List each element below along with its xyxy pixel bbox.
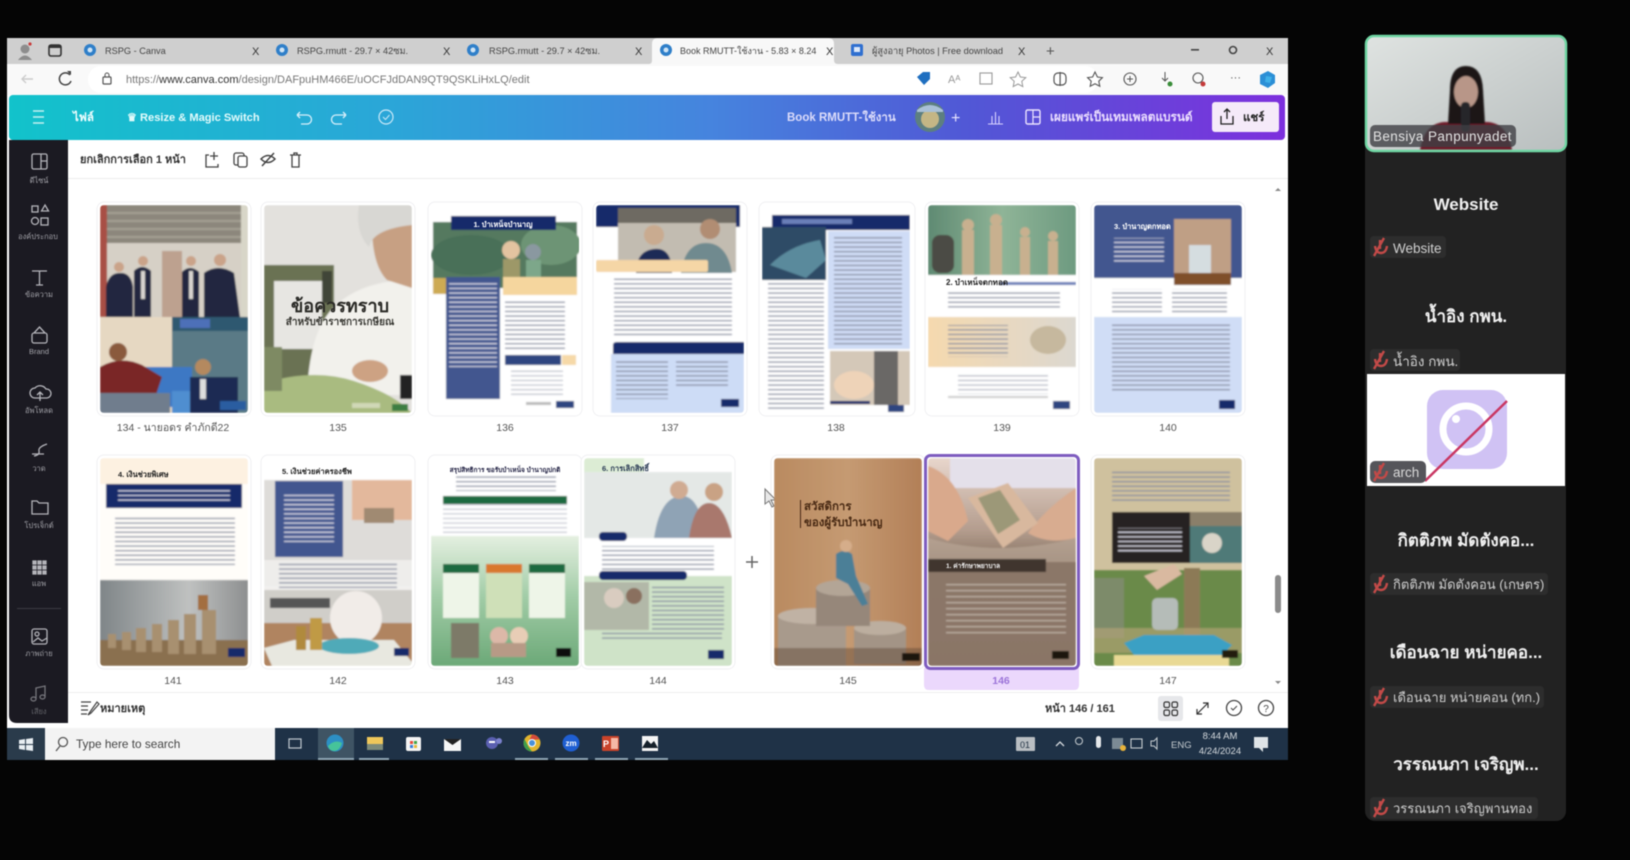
tab strip: X bbox=[1266, 46, 1274, 58]
participant: name 4 bbox=[1370, 531, 1548, 595]
tab strip: Book RMUTT-ใช้งาน - 5.83 × 8.24 bbox=[680, 46, 816, 56]
page 146 label: 146 bbox=[992, 675, 1010, 687]
name tag bbox=[1370, 125, 1516, 147]
address bar: ··· bbox=[1230, 72, 1241, 84]
participant: Website bbox=[1370, 195, 1498, 258]
system tray bbox=[1016, 731, 1268, 757]
page 140 label: 140 bbox=[1159, 422, 1177, 434]
app logo bbox=[1425, 390, 1507, 481]
icon: uploads bbox=[30, 386, 51, 401]
page 139 thumbnail bbox=[928, 205, 1076, 413]
sidebar labels: เสียง bbox=[31, 707, 47, 716]
page 134 label: 134 - นายอดร คำภักดี22 bbox=[117, 421, 229, 434]
address bar bbox=[7, 64, 1288, 95]
participant: name 6 bbox=[1370, 755, 1539, 819]
notes bar: หน้า 146 / 161 bbox=[1045, 702, 1115, 715]
system tray: ENG bbox=[1171, 740, 1192, 751]
canva top bar: ไฟล์ bbox=[71, 110, 94, 124]
thumbnail title: สำหรับข้าราชการเกษียณ bbox=[286, 316, 395, 328]
page 146 thumbnail selected bbox=[928, 458, 1076, 666]
page 136 thumbnail bbox=[431, 205, 581, 413]
page 135 label: 135 bbox=[329, 422, 347, 434]
tab strip bbox=[7, 38, 1288, 64]
share button bbox=[1212, 102, 1279, 132]
icon: elements bbox=[32, 205, 48, 225]
thumbnail heading: 5. เงินช่วยค่าครองชีพ bbox=[282, 467, 352, 476]
mouse cursor bbox=[765, 489, 776, 507]
windows taskbar bbox=[7, 728, 1288, 760]
sidebar labels: อัพโหลด bbox=[25, 406, 53, 415]
canva top bar: Book RMUTT-ใช้งาน bbox=[787, 110, 896, 124]
tab strip: X bbox=[443, 46, 451, 58]
sidebar labels: ดีไซน์ bbox=[29, 176, 49, 185]
participant: Website: Website bbox=[1434, 195, 1498, 214]
grid view button bbox=[1158, 696, 1183, 721]
tab strip: RSPG.rmutt - 29.7 × 42ซม. bbox=[489, 46, 600, 56]
taskbar app icons: zm bbox=[565, 739, 577, 748]
page 143 thumbnail bbox=[431, 458, 579, 666]
taskbar app icons: P bbox=[603, 739, 609, 749]
tab strip: X bbox=[826, 46, 834, 58]
page 137 thumbnail bbox=[596, 205, 744, 413]
sidebar labels: แอพ bbox=[32, 579, 46, 588]
thumbnail heading: 6. การเลิกสิทธิ์ bbox=[602, 462, 650, 473]
tab strip: ผู้สูงอายุ Photos | Free download bbox=[872, 46, 1003, 57]
page 144 thumbnail bbox=[584, 458, 732, 666]
page 137 label: 137 bbox=[661, 422, 679, 434]
participant: name 2 bbox=[1370, 303, 1507, 371]
thumbnail title: ข้อควรทราบ bbox=[291, 296, 389, 316]
thumbnail heading: 4. เงินช่วยพิเศษ bbox=[118, 470, 169, 479]
page 141 label: 141 bbox=[164, 675, 182, 687]
add page plus bbox=[746, 556, 758, 568]
canva top bar bbox=[9, 95, 1285, 140]
icon: apps bbox=[33, 561, 46, 574]
zoom participant panel bbox=[1365, 36, 1566, 821]
editor toolbar bbox=[68, 140, 1288, 179]
sidebar labels: วาด bbox=[32, 464, 46, 473]
thumbnail heading: 1. ค่ารักษาพยาบาล bbox=[946, 562, 1000, 570]
taskbar app icons bbox=[326, 734, 658, 752]
participant: name 5 bbox=[1370, 642, 1544, 708]
participant: name 6: วรรณนภา เจริญพานทอง bbox=[1393, 801, 1532, 816]
tab strip: X bbox=[635, 46, 643, 58]
sidebar labels: ภาพถ่าย bbox=[25, 649, 53, 658]
page 136 label: 136 bbox=[496, 422, 514, 434]
thumbnail heading: 3. บำนาญตกทอด bbox=[1114, 222, 1171, 231]
thumbnail title bbox=[286, 296, 395, 328]
participant: name 2: น้ำอิง กพน. bbox=[1425, 303, 1507, 326]
scrollbar bbox=[1275, 188, 1281, 684]
page 138 label: 138 bbox=[827, 422, 845, 434]
participant: Website: Website bbox=[1393, 241, 1442, 256]
icon: menu bbox=[33, 111, 44, 123]
page 135 thumbnail bbox=[264, 205, 412, 413]
share button: แชร์ bbox=[1243, 110, 1265, 124]
participant: name 2: น้ำอิง กพน. bbox=[1393, 351, 1458, 369]
page grid bbox=[97, 202, 1245, 687]
address bar: Aᴬ bbox=[948, 74, 960, 86]
canva top bar: เผยแพร่เป็นเทมเพลตแบรนด์ bbox=[1050, 109, 1193, 124]
selected page highlight bbox=[924, 668, 1079, 690]
search box: Type here to search bbox=[76, 737, 180, 751]
speaker video tile bbox=[1366, 36, 1566, 151]
sidebar labels: โปรเจ็กต์ bbox=[24, 520, 54, 530]
participant: name 5: เดือนฉาย หน่ายคอ... bbox=[1390, 642, 1542, 662]
tab strip: X bbox=[252, 46, 260, 58]
sidebar labels: ข้อความ bbox=[25, 290, 53, 299]
page 147 thumbnail bbox=[1094, 458, 1242, 666]
thumbnail title: สวัสดิการ bbox=[804, 500, 852, 513]
address bar: https://www.canva.com/design/DAFpuHM466E/uOCFJdDAN9QT9QSKLiHxLQ/edit bbox=[126, 74, 530, 86]
thumbnail title bbox=[800, 500, 883, 530]
page 142 thumbnail bbox=[264, 458, 412, 666]
system tray: 8:44 AM bbox=[1203, 731, 1238, 742]
icon: windows bbox=[19, 738, 33, 751]
tab strip: X bbox=[1018, 46, 1026, 58]
page 141 thumbnail bbox=[100, 458, 248, 666]
participant: name 5: เดือนฉาย หน่ายคอน (ทก.) bbox=[1393, 690, 1540, 705]
page 144 label: 144 bbox=[649, 675, 667, 687]
thumbnail title: ของผู้รับบำนาญ bbox=[804, 515, 883, 530]
thumbnail heading: 2. บำเหน็จตกทอด bbox=[946, 276, 1008, 287]
page 139 label: 139 bbox=[993, 422, 1011, 434]
icon: audio bbox=[31, 686, 45, 701]
notes bar: ? bbox=[1263, 704, 1269, 715]
page 142 label: 142 bbox=[329, 675, 347, 687]
search box bbox=[45, 728, 275, 760]
sidebar labels bbox=[18, 176, 58, 716]
browser window bbox=[7, 38, 1288, 760]
icon: design bbox=[32, 154, 47, 169]
system tray: 01 bbox=[1020, 740, 1030, 750]
sidebar labels: Brand bbox=[29, 347, 49, 356]
canva top bar: + bbox=[951, 110, 960, 127]
participant tile: arch bbox=[1367, 374, 1565, 486]
icon: draw bbox=[32, 444, 47, 456]
page 143 label: 143 bbox=[496, 675, 514, 687]
sidebar labels: องค์ประกอบ bbox=[18, 232, 58, 241]
page 134 thumbnail bbox=[100, 205, 248, 413]
page 147 label: 147 bbox=[1159, 675, 1177, 687]
notes bar: หมายเหตุ bbox=[100, 703, 145, 716]
icon: folder bbox=[32, 501, 48, 514]
participant tile: arch: arch bbox=[1393, 465, 1419, 480]
thumbnail heading: 1. บำเหน็จบำนาญ bbox=[473, 219, 533, 229]
name tag: Bensiya Panpunyadet bbox=[1373, 129, 1512, 144]
tab strip: RSPG.rmutt - 29.7 × 42ซม. bbox=[297, 46, 408, 56]
participant: name 4: กิตติภพ มัดตังคอน (เกษตร) bbox=[1393, 577, 1544, 592]
icon: photos bbox=[32, 629, 47, 644]
icon: text bbox=[32, 271, 47, 285]
editor toolbar: ยกเลิกการเลือก 1 หน้า bbox=[80, 153, 186, 166]
system tray: 4/24/2024 bbox=[1199, 746, 1241, 757]
canva top bar: ♛ Resize & Magic Switch bbox=[127, 112, 260, 124]
page 145 label: 145 bbox=[839, 675, 857, 687]
icon: brand bbox=[32, 327, 47, 343]
participant: name 4: กิตติภพ มัดตังคอ... bbox=[1398, 531, 1534, 550]
selection border bbox=[926, 456, 1078, 668]
left sidebar bbox=[9, 140, 68, 723]
tab strip: RSPG - Canva bbox=[105, 46, 167, 56]
participant: name 6: วรรณนภา เจริญพ... bbox=[1393, 755, 1539, 775]
tab strip: + bbox=[1046, 43, 1055, 60]
page 138 thumbnail bbox=[762, 205, 912, 413]
page 140 thumbnail bbox=[1094, 205, 1242, 413]
avatar bbox=[915, 102, 945, 132]
page 145 thumbnail bbox=[774, 458, 922, 666]
notes bar bbox=[68, 692, 1288, 721]
thumbnail heading: สรุปสิทธิการ ขอรับบำเหน็จ บำนาญปกติ bbox=[450, 465, 560, 474]
